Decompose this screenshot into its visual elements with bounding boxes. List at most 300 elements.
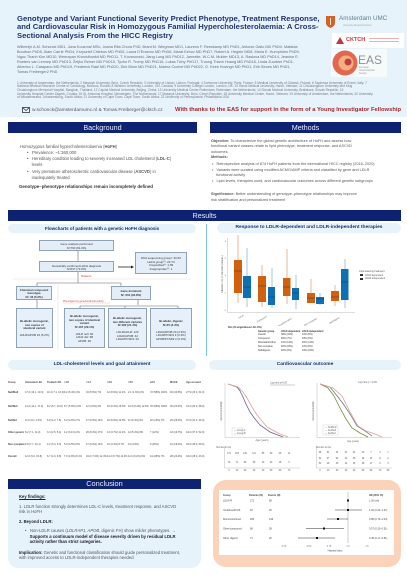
- survival chart: right: 15: [370, 458, 373, 460]
- table: LDL-C: 14.2 (6.7%) 11.0%: [107, 455, 128, 458]
- box: bi-allelic identical: N=187 (29.1%): [75, 324, 94, 328]
- table: LDL-C: Null/Null: [8, 391, 18, 394]
- box: bi-allelic null: [16, 308, 53, 348]
- table: LDL-C: 22 (14%) 7%: [150, 418, 164, 422]
- survival chart: right: — Null/Null: [325, 427, 337, 429]
- box plot: 4: [225, 275, 227, 277]
- box: confirmed diagnosis: Genetically confirmed HoFH diagnosis: [52, 264, 101, 268]
- survival chart: right: 70: [379, 470, 382, 472]
- survival chart: left: Number at risk: [216, 446, 232, 449]
- table: LDL-C: 9 (15%): [150, 443, 159, 446]
- subheading: cardiovascular outcome: Cardiovascular outcome: [277, 362, 333, 367]
- authors: Bourbon PhD5, Alain Carrié PhD4, Krzysztof Chlebus MD PhD5, Laura D'Erasmo MD PhD6, Marat Ezhov MD PhD7, Robert A. Hegele MD8, Maria E. Humphries PhD9,: [17, 50, 300, 54]
- table: LDL-C: MACE: [170, 381, 177, 384]
- table: LDL-C: Group: [8, 381, 16, 384]
- panel: methods text: outcomes.: [211, 150, 229, 154]
- subheading: LDL-C levels: [8, 360, 196, 370]
- survival chart: left: 29: [279, 453, 282, 455]
- affiliations: 1 University of Amsterdam, the Netherlands; 2 Masaryk University, Brno, Czech Republic; 3 University of Lisbon, Lisbon, Portugal; 4 Sorbonne University, Paris, France; 5 Medical University of Gdansk, Poland; 6 Sapienza University of Rome, Italy; 7: [17, 80, 367, 84]
- survival chart: right: 42: [345, 463, 348, 465]
- icon: envelope: [22, 107, 30, 113]
- box: gene dominant: Gene dominant: [120, 289, 142, 293]
- box plot: Compound: [257, 316, 268, 323]
- table: LDL-C: 3.4 (2.5, 5.4): [47, 431, 61, 434]
- response table: 18% (9%): [281, 349, 292, 352]
- table: LDL-C: 72 (58%) 100%: [150, 391, 167, 394]
- survival chart: left: Age (years): [256, 439, 269, 442]
- table: LDL-C: 4.2 (3.3, 6.3): [47, 443, 61, 446]
- response table: Overall: [258, 333, 266, 336]
- box: gene dominant: [111, 286, 151, 300]
- panel: background text: levels: [32, 162, 42, 167]
- survival chart: left: 50: [270, 470, 273, 472]
- heading: Conclusion: [8, 479, 201, 490]
- survival chart: right: 80: [387, 470, 390, 472]
- survival chart: right: 60: [370, 470, 373, 472]
- table: LDL-C: 31.0 (26.0, 38.0): [186, 405, 204, 408]
- authors: Roeters van Lennep MD PhD13, Željko Reiner MD PhD15, Tycho R. Tromp MD PhD16, Lukas Tichy PhD17, Truong Thanh Hoang MD PhD18, Linda Zuurbier PhD1,: [17, 60, 294, 64]
- panel: conclusion: 1. LDLR function strongly determines LDL-C levels, treatment response, and ASCVD: [19, 504, 176, 509]
- response table: LDLR-independent: [302, 330, 323, 332]
- panel: methods text: • Lipid levels, therapies used, and cardiovascular outcomes across different genetic subgroups: [212, 179, 373, 183]
- heading: Background: [8, 122, 197, 133]
- table: LDL-C: <1.8: [64, 381, 69, 384]
- table: LDL-C: 12 (19.0%): [170, 443, 182, 446]
- survival chart: right: — Def/Null: [325, 430, 337, 432]
- box plot: [221, 235, 355, 326]
- table: LDL-C: 12.0 (8.2%) 12.6%: [128, 405, 149, 408]
- forest plot card: HR (95% CI): [369, 494, 383, 497]
- title: Sectional Analysis From the HICC Registry: [17, 31, 173, 40]
- forest plot card: Other digenic: [223, 537, 239, 540]
- table: LDL-C: 16 (5.5%) 7%: [86, 391, 101, 394]
- table: LDL-C: 37.0 (31.0, 44.0): [186, 418, 204, 422]
- panel: conclusion: Supports a continuum model of disease severity driven by residual LDLR: [30, 534, 176, 539]
- survival chart: right: 36: [353, 463, 356, 465]
- table: LDL-C: 36 (24.0%): [170, 405, 182, 408]
- survival chart: left: 71: [236, 462, 239, 464]
- survival chart: right: Survival probability: [312, 401, 315, 421]
- box: bi-allelic null: Bi-allelic monogenic,: [20, 319, 49, 323]
- box plot: 0: [225, 310, 227, 312]
- survival chart: right: Number at risk: [316, 446, 332, 449]
- forest plot card: 40: [250, 509, 253, 512]
- box plot legend: LDLR-dependent: [365, 274, 383, 277]
- logo: Amsterdam UMC: [326, 15, 387, 28]
- box plot: LDLR: [238, 315, 245, 320]
- table: LDL-C: 6.2 (4.6%) 7%: [64, 418, 80, 422]
- forest plot card: 0.45 (0.17–0.81): [369, 537, 388, 540]
- table: LDL-C: <3.5: [128, 381, 133, 384]
- survival chart: right: 40: [353, 470, 356, 472]
- forest plot card: 0.50: [307, 546, 312, 548]
- authors: Willemijn A.M. Schonck MD1, Jana Kouzmal MSc, Joana Rita Chora PhD, Brant M. Wiegman MD1, Laurens F. Reeskamp MD PhD1, Antonio Gallo MD PhD4, Mafalda: [17, 45, 297, 49]
- forest plot card: 0.57 (0.33–0.91): [369, 528, 388, 530]
- survival chart: right: 31: [345, 452, 348, 454]
- box plot: Absolute LDL-C reduction (mmol/L): [221, 255, 224, 293]
- table: LDL-C: 9.8 (7.7, 12.1): [25, 443, 41, 446]
- authors: Alberico L. Catapano MD PhD19, Frederick Raal MD PhD20, Dirk Blom MD PhD21, Marina Cuchel MD PhD22, G. Kees Hovingh MD PhD1, Erik Stroes MD PhD1,: [17, 65, 290, 69]
- authors: Ngoc Thanh Kim MD10, Weerapan Khovidhunkit MD PhD11, T. Kovanovski, Jiang Long MD PhD12, Jannette, W.C.M. Mulder MD13, A. Raslova MD PhD14, Jeanine E.: [17, 55, 299, 59]
- survival chart: right: 1: [387, 452, 389, 454]
- table: LDL-C: 7 (12%): [150, 431, 159, 434]
- panel: methods text: functional activity: [216, 173, 245, 177]
- table: LDL-C: 13 (3.7%) 11.1%: [107, 431, 125, 434]
- table: LDL-C: 5.8 (4.2, 7.5): [47, 418, 61, 422]
- forest plot card: 172: [250, 500, 255, 502]
- box: bi-allelic digenic: Bi-allelic, digenic: [159, 319, 183, 323]
- box: bi-allelic null: LDLR/APOB 33 (5.2%): [20, 333, 49, 337]
- survival chart: right: 20: [336, 470, 339, 472]
- affiliations: [17, 80, 373, 99]
- panel: background text: • Prevalence: ~1:360,000: [27, 150, 76, 155]
- survival chart: right: 43: [345, 458, 348, 460]
- box: bi-allelic identical: two copies of identical: [69, 318, 100, 322]
- survival chart: left: 20: [244, 470, 247, 472]
- forest plot card: 89: [269, 500, 272, 502]
- table: LDL-C: 8.7 (5.9%) 11%: [64, 405, 81, 408]
- box: excluded patients: [135, 252, 187, 274]
- heading: Methods: Methods: [292, 123, 319, 132]
- table: LDL-C: 16 (5.6%) 12.5%: [107, 418, 126, 422]
- table: LDL-C: 8.2 (7.1, 11.0): [25, 431, 40, 434]
- survival chart: right: 26: [362, 458, 365, 460]
- table: LDL-C: Untreated LDL: [25, 381, 42, 384]
- response table: 31% (5%): [302, 333, 312, 336]
- table: LDL-C: 49 (34.5%): [170, 391, 182, 394]
- box: bi-allelic identical: [64, 308, 105, 348]
- box: bi-allelic null: two copies of: [25, 322, 44, 326]
- forest plot card: 1.00 (ref): [369, 500, 379, 502]
- logo: EAS: European: [359, 67, 369, 69]
- response table: 33% (6%): [302, 337, 312, 340]
- forest plot card: Patients (N): [249, 494, 263, 497]
- authors: [17, 45, 300, 74]
- affiliations: University Hospital Center Zagreb, Croatia; 16 St. Antonius Hospital, Nieuwegein, The Netherlands; 17 Masaryk University, Brno, Czech Republic; 18 University Medical Center, Hanoi, Vietnam; 19 University of Amsterdam, the Netherlands; 20 University: [17, 92, 373, 96]
- box: gene dominant: N= 604 (94.8%): [121, 292, 141, 296]
- response table: 41% (12%): [281, 341, 293, 344]
- table: LDL-C: 43.0 (35.0, 50.0): [186, 443, 204, 446]
- forest plot card: 71: [250, 537, 253, 540]
- box: genetic analysis: [39, 240, 114, 251]
- box: bi-allelic identical: LDLR null: 60: [76, 332, 93, 336]
- box: chemical compound: [16, 286, 52, 300]
- table: LDL-C: 12 (8.9%) 11.1%: [107, 391, 125, 394]
- table: LDL-C: 28 (24.2%): [170, 455, 182, 458]
- response table: LDLR-dependent: [281, 330, 300, 332]
- box: bi-allelic identical: variant: [80, 321, 89, 325]
- authors: Tomas Freiberger2 PhD: [17, 70, 57, 74]
- survival chart: left: 70: [288, 470, 291, 472]
- survival chart: right: 17: [370, 463, 373, 465]
- survival chart: right: 30: [345, 470, 348, 472]
- box: confirmed diagnosis: N=637 (73.0%): [67, 267, 86, 271]
- table: LDL-C: 11.0 (9.1, 13.5): [25, 418, 42, 422]
- table: LDL-C: 5.0 (3.5%) 5%: [64, 443, 80, 446]
- table: LDL-C: Other genetic: [8, 431, 24, 434]
- response table: 12% (6%): [302, 345, 312, 348]
- subheading: LDL-C levels: LDL-cholesterol levels and goal attainment: [54, 362, 150, 367]
- panel: methods text: Objective: To characterize the global genetic architecture of HoFH and assess how: [211, 139, 351, 143]
- panel: methods text: [211, 139, 375, 202]
- table: LDL-C: 26 (8.4%) 17%: [86, 431, 103, 434]
- table: LDL-C: 12 (4.1%) 8.7%: [107, 443, 124, 446]
- table: LDL-C: 27.5 (23.0, 31.0): [186, 391, 204, 394]
- table: LDL-C: Def/Null: [8, 405, 17, 408]
- box: confirmed diagnosis: [39, 261, 114, 272]
- logo: Amsterdam UMC: Amsterdam UMC: [339, 15, 387, 22]
- subheading: cardiovascular outcome: [209, 360, 401, 370]
- table: LDL-C: 12.0 (9.0, 15.8): [25, 455, 42, 458]
- box: bi-allelic different: two different variants: [113, 320, 142, 324]
- panel: conclusion: Key findings:: [19, 494, 46, 499]
- response table: 29% (14%): [302, 341, 314, 344]
- panel: background text: Genotype–phenotype relationships remain incompletely defined: [19, 184, 153, 189]
- survival chart: right: — Def/Def: [325, 433, 336, 435]
- survival chart: left: 55: [253, 462, 256, 464]
- heading: Results: Results: [193, 211, 216, 220]
- survival chart: left: 142: [243, 453, 248, 455]
- table: LDL-C: Age at event: [186, 381, 201, 384]
- forest plot card: 0.75: [327, 546, 332, 548]
- forest plot card: 146: [269, 518, 274, 521]
- forest plot card: 68: [250, 528, 253, 530]
- survival chart: left: 60: [279, 470, 282, 472]
- forest plot card: Other/compound: [223, 528, 242, 530]
- table: LDL-C: 17.0 (13.1, 19.3): [25, 391, 43, 394]
- survival chart: right: 10: [327, 470, 330, 472]
- table: LDL-C: 44.0 (37.0, 52.0): [186, 431, 204, 434]
- survival chart: right: 2: [387, 458, 389, 460]
- box plot legend: LDLR-independent: [365, 277, 385, 280]
- panel: methods text: risk stratification and personalized treatment: [211, 198, 285, 202]
- table: LDL-C: ≥3.5: [150, 381, 155, 384]
- box: bi-allelic identical: Bi-allelic monogenic,: [70, 314, 99, 318]
- table: LDL-C: 14 (5.2%) 8%: [128, 431, 143, 434]
- response table: 38% (31%): [281, 333, 293, 336]
- forest plot card: 1.5: [365, 546, 369, 548]
- panel: background text: [19, 144, 171, 189]
- table: LDL-C: 14.0 (11.1, 17.0): [25, 405, 43, 408]
- affiliations: National Medical Research Centre of Cardiology, Moscow, Russia; 8 Western University, London, ON, Canada; 9 University College London, London, UK; 10 Hanoi Medical University, Hanoi, Vietnam; 11 Chulalongkorn University and King: [17, 84, 352, 88]
- heading: Background: Background: [83, 123, 122, 132]
- table: LDL-C: 41 (28%) 7%: [150, 455, 164, 458]
- box: bi-allelic different: LDLR/LDLR: 120: [116, 330, 138, 334]
- box: bi-allelic digenic: LDLR/APOB 20 (2.9%): [156, 330, 186, 334]
- table: LDL-C: 6.7 (4.3, 9.8): [47, 455, 61, 458]
- logo: EAS: EAS: [358, 53, 382, 67]
- survival chart: right: 52: [336, 458, 339, 460]
- table: LDL-C: 29 (25.0%): [170, 418, 182, 422]
- survival chart: right: 51: [327, 452, 330, 454]
- survival chart: right: Age (years): [347, 440, 359, 443]
- box: excluded patients: DNA sequencing group²: 33-53: [141, 256, 181, 260]
- panel: background text: inadequately treated: [32, 175, 70, 180]
- table: LDL-C: 18 (9.4%) 15.3%: [107, 405, 126, 408]
- forest plot card: Undefined/VUS: [223, 509, 241, 512]
- table: LDL-C: Non-complete: [8, 443, 25, 446]
- survival chart: right: 15: [362, 452, 365, 454]
- subheading: flowcharts: [8, 224, 196, 233]
- survival chart: right: 3: [387, 463, 389, 465]
- box: excluded patients: Inappropriate⁵⁵: 1: [150, 266, 172, 270]
- survival chart: left: 30: [253, 470, 256, 472]
- heading: Results: [8, 210, 401, 221]
- box: excluded patients: Unspecified⁵ᵗ: 1-59: [149, 263, 173, 267]
- divider line between results columns: [205, 224, 208, 356]
- survival chart: left: 11: [288, 453, 291, 455]
- logo: EAS: Atherosclerosis: [359, 70, 375, 72]
- survival chart: left: 40: [262, 470, 265, 472]
- survival chart: right: 62: [319, 458, 322, 460]
- panel: forest plot: [213, 480, 401, 567]
- table: LDL-C: 8.2 (5.7, 10.8): [47, 405, 63, 408]
- survival chart: left: 30: [270, 462, 273, 464]
- box: chemical compound: Chemical compound: [20, 288, 48, 292]
- survival chart: left: Log-rank p=0.05: [270, 382, 288, 384]
- box: bi-allelic digenic: N=25 (3.4%): [163, 322, 179, 326]
- response table: Sim (% target/above LDL-C%): [228, 326, 262, 329]
- panel: background text: Homozygous familial hypercholesterolaemia (HoFH): [20, 144, 117, 149]
- survival chart: left: 18: [279, 462, 282, 464]
- survival chart: right: Log-rank p < 0.001: [358, 381, 378, 384]
- survival chart: left: — Group B: [234, 432, 246, 435]
- response table: Null/digenic: [258, 349, 270, 352]
- table: LDL-C: 13 (4.9%): [128, 443, 139, 446]
- title: Genotype and Variant Functional Severity Predict Phenotype, Treatment Response,: [17, 14, 320, 22]
- panel: methods text: • Variants were curated using modified ACMG/AMP criteria and classified by gene and LDLR: [212, 168, 369, 172]
- table: LDL-C: 10 (16.7%): [170, 431, 182, 434]
- panel: background text: • Hereditary condition leading to severely increased LDL cholesterol (LDL-C): [27, 156, 171, 161]
- box: chemical compound: Genotype: [27, 291, 41, 295]
- logo: EAS: [331, 49, 387, 77]
- survival chart: left: 0: [228, 470, 230, 472]
- survival chart: left: 60: [270, 453, 273, 455]
- survival chart: right: 58: [319, 452, 322, 454]
- survival chart: left: 172: [227, 453, 232, 455]
- box: bi-allelic digenic: [150, 308, 192, 348]
- table: LDL-C: 11 (6.4%) 9%: [128, 418, 143, 422]
- panel: conclusion: 2. Beyond LDLR:: [19, 519, 53, 524]
- survival chart: right: 49: [327, 463, 330, 465]
- response table: 20% (18%): [281, 345, 293, 348]
- affiliations: of Witwatersrand, Johannesburg, South Africa; 21 University of Cape Town, Cape Town, South Africa; 22 University of Pennsylvania, Philadelphia USA: [17, 95, 229, 99]
- box plot: 8: [225, 241, 227, 243]
- box: bi-allelic different: LDLR/APOB: 42: [117, 334, 138, 338]
- box: bi-allelic different: [108, 308, 147, 348]
- forest plot card: 0.85 (0.70–1.04): [369, 518, 388, 521]
- box: excluded patients: HeFH group⁵⁵: 20-73: [147, 260, 175, 264]
- forest plot card: [219, 490, 394, 555]
- forest plot card: 1.0: [346, 546, 350, 548]
- forest plot card: LDLR-R: [223, 500, 232, 502]
- box plot: 2: [225, 293, 227, 295]
- subheading: flowcharts: Flowcharts of patients with a genetic HoFH diagnosis: [45, 226, 159, 230]
- forest plot card: Hazard ratio: [328, 548, 343, 552]
- panel: conclusion: risk in HoFH: [19, 509, 42, 514]
- box: bi-allelic identical: APOB: 29: [78, 338, 91, 342]
- box: bi-allelic different: N=182 (21.4%): [118, 323, 137, 327]
- subheading: therapy response: Response to LDLR-dependent and LDLR-independent therapies: [236, 225, 382, 230]
- forest plot card: 20: [269, 509, 272, 512]
- box: bi-allelic digenic: APOB/PCSK9 2 (0.3%): [156, 336, 186, 340]
- contact emails: w.schonck@amsterdamumc.nl & Tomas.Freiberger@cktch.cz: [32, 108, 163, 112]
- box plot: Null/digenic: [329, 317, 341, 325]
- box plot legend: Lipid-lowering treatment: [359, 270, 385, 273]
- forest plot card: Events (N): [268, 494, 281, 497]
- survival chart: left: 66: [244, 462, 247, 464]
- table: LDL-C: 19.0 (7.0%) 12.4%: [86, 455, 107, 458]
- box: bi-allelic different: Bi-allelic monogenic,: [113, 316, 142, 320]
- survival chart: left: 6: [288, 462, 290, 464]
- table: LDL-C: 2.1 (1.6%) 2%: [128, 391, 144, 394]
- panel: methods text: Methods:: [211, 155, 228, 159]
- panel: conclusion: with improved access to LDLR-independent therapies needed: [19, 555, 134, 560]
- survival chart: right: 24: [353, 452, 356, 454]
- table: LDL-C: 12 (4.9%) 9%: [86, 405, 101, 408]
- survival chart: right: 0: [319, 470, 321, 472]
- title: [17, 14, 320, 40]
- table: LDL-C: <2.6: [107, 381, 112, 384]
- box: genetic analysis: N=790 (81.0%): [67, 246, 86, 250]
- panel: methods text: • Retrospective analysis of 874 HoFH patients from the international HICC registry (2016–2020): [212, 162, 375, 166]
- table: LDL-C: <1.4: [86, 381, 91, 384]
- table: LDL-C: 17 (6.0%) 12%: [86, 443, 103, 446]
- survival chart: left: 76: [228, 462, 231, 464]
- table: LDL-C: 11.6 (6.2%) 9%: [128, 455, 145, 458]
- box: bi-allelic null: identical variant: [23, 326, 46, 330]
- survival chart: left: — Group A: [234, 429, 246, 432]
- response table: Genetic group: [258, 330, 274, 332]
- table: LDL-C: 10.4 (7.1, 13.3): [47, 391, 64, 394]
- table: LDL-C: [8, 381, 204, 458]
- table: LDL-C: 9.2 (6.4%) 4%: [64, 391, 80, 394]
- panel: methods text: functional variant classes relate to lipid phenotype, treatment response, and ASCVD: [211, 144, 352, 148]
- panel: conclusion: Implication: Genetic and functional classification should guide personalized treatment,: [19, 550, 180, 554]
- box plot legend: [359, 270, 385, 280]
- box plot: 6: [225, 258, 227, 260]
- table: LDL-C: Treated LDL: [47, 381, 61, 384]
- response table: 34% (22%): [302, 349, 314, 352]
- logo: Amsterdam UMC: University Medical Centers: [343, 24, 371, 26]
- table: LDL-C: 4.2 (3.1%) 2%: [64, 431, 80, 434]
- survival chart: right: 44: [336, 452, 339, 454]
- panel: methods text: Significance: Better understanding of genotype–phenotype relationships may improve: [211, 192, 357, 196]
- forest plot card: 20: [269, 537, 272, 540]
- survival chart: right: 7: [370, 452, 372, 454]
- forest plot card: 265: [250, 518, 255, 521]
- response table: Compound: [258, 337, 270, 340]
- table: LDL-C: 34.0 (28.0, 43.0): [186, 455, 204, 458]
- survival chart: right: 46: [336, 463, 339, 465]
- forest plot card: 28: [269, 528, 272, 530]
- survival chart: left: 10: [236, 470, 239, 472]
- box: bi-allelic digenic: LDLR/PCSK9 3 (0.4%): [156, 333, 186, 337]
- survival chart: left: 43: [262, 462, 265, 464]
- heading: Conclusion: Conclusion: [86, 479, 123, 488]
- survival chart: left: Survival probability: [220, 401, 223, 421]
- forest plot card: Mono/combined: [223, 518, 241, 521]
- affiliations: Chulalongkorn Memorial Hospital, Bangkok, Thailand; 12 Capital Medical University, Beijing, China; 13 University Medical Center Rotterdam, Rotterdam, the Netherlands; 14 Slovak Medical University, Bratislava, Slovak Republic; 15: [17, 88, 343, 92]
- header band: [0, 0, 407, 117]
- survival chart: right: 8: [379, 458, 381, 460]
- survival chart: right: 50: [362, 470, 365, 472]
- forest plot card: 1.00 (0.62–1.37): [369, 509, 388, 512]
- survival chart: left: 111: [252, 453, 256, 455]
- response table: Monoallelic/other: [258, 341, 276, 344]
- survival chart: right: 28: [362, 463, 365, 465]
- heading: Methods: [210, 122, 401, 133]
